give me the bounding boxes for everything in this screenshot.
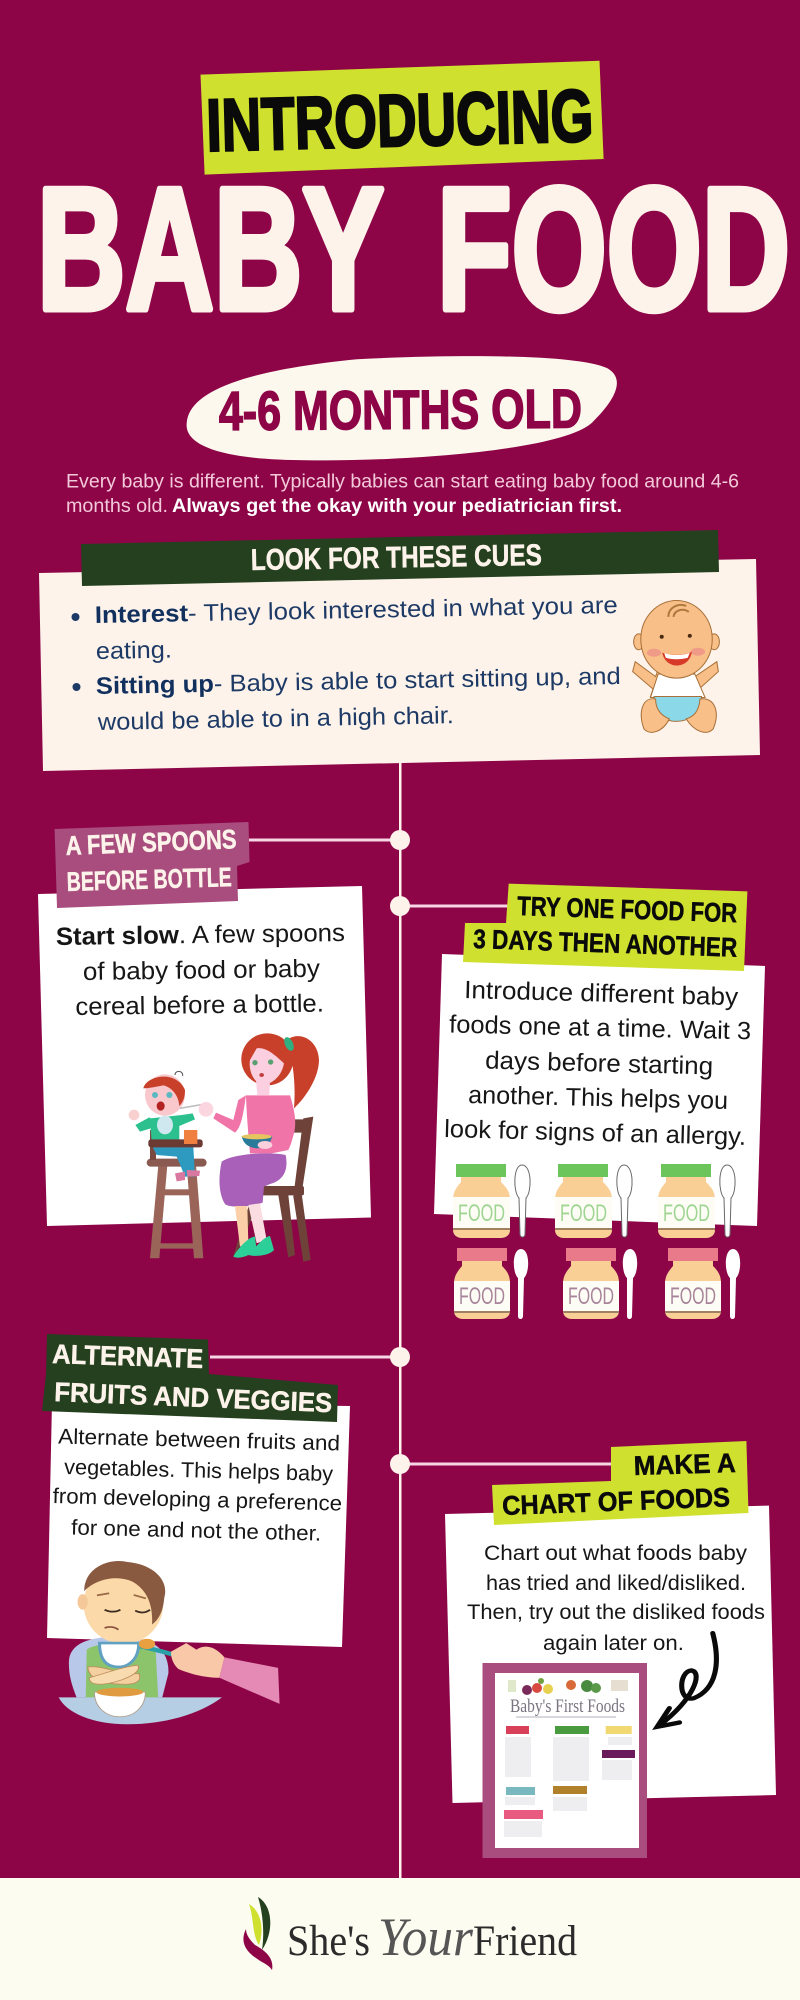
illustration: baby refusing food <box>59 1561 280 1724</box>
arrow <box>657 1633 716 1727</box>
icon: green lid food jars <box>453 1164 715 1238</box>
cues banner <box>81 530 719 586</box>
label: try one food for 3 days then another: 3 DAYS THEN ANOTHER <box>473 924 738 963</box>
body text <box>52 1425 342 1546</box>
heading: introducing: INTRODUCING <box>205 74 594 167</box>
body text: for one and not the other. <box>71 1516 321 1546</box>
body text <box>444 976 751 1151</box>
icon: pink lid food jars <box>454 1248 721 1319</box>
logo: she's your friend: Friend <box>473 1918 577 1965</box>
intro text <box>66 470 739 517</box>
body text: from developing a preference <box>52 1484 342 1516</box>
card: alternate <box>47 1402 350 1647</box>
age badge: 4-6 MONTHS OLD <box>219 377 582 442</box>
cues heading: LOOK FOR THESE CUES <box>251 539 542 577</box>
footer <box>0 1878 800 2000</box>
body text: foods one at a time. Wait 3 <box>449 1011 751 1045</box>
logo: flame <box>243 1897 272 1970</box>
card: chart of foods <box>445 1506 776 1803</box>
icon: green lid food jars: FOOD <box>663 1200 710 1227</box>
body text: Introduce different baby <box>464 976 739 1011</box>
cue: sitting up: would be able to in a high chair. <box>97 702 454 736</box>
body text: again later on. <box>543 1632 684 1655</box>
panel: make a chart of foods <box>445 1441 776 1858</box>
icon: smiling baby <box>633 600 719 732</box>
cue: interest <box>72 592 618 665</box>
icon: green lid food jars: FOOD <box>560 1200 607 1227</box>
label: try one food for 3 days then another: TRY ONE FOOD FOR <box>517 891 738 928</box>
label: make a chart of foods <box>492 1441 748 1525</box>
body text: look for signs of an allergy. <box>444 1115 746 1151</box>
icon: pink lid food jars: FOOD <box>670 1283 716 1310</box>
intro text: Every baby is different. Typically babies can start eating baby food around 4-6 <box>66 470 739 492</box>
cues card <box>39 559 760 771</box>
chart heading: Baby's First Foods <box>510 1696 625 1717</box>
body text: vegetables. This helps baby <box>64 1455 334 1486</box>
intro text: months old. <box>66 495 168 517</box>
card: try one food <box>434 954 765 1226</box>
icon: pink lid food jars: FOOD <box>568 1283 614 1310</box>
timeline connectors and dots <box>210 760 611 1878</box>
body text <box>56 919 345 1021</box>
label: a few spoons before bottle: A FEW SPOONS <box>65 824 237 861</box>
label: a few spoons before bottle: BEFORE BOTTLE <box>66 862 232 897</box>
heading: baby food <box>37 151 790 346</box>
body text: cereal before a bottle. <box>75 990 324 1021</box>
body text: Chart out what foods baby <box>484 1542 748 1565</box>
body text: days before starting <box>485 1047 713 1080</box>
label: make a chart of foods: CHART OF FOODS <box>502 1482 731 1521</box>
cue: sitting up: Sitting up - Baby is able to start sitting up, and <box>96 663 621 700</box>
panel: alternate fruits and veggies <box>42 1334 350 1724</box>
food pictures <box>508 1678 628 1695</box>
label: alternate fruits and veggies: FRUITS AND VEGGIES <box>54 1377 333 1418</box>
body text <box>467 1542 765 1655</box>
body text: Then, try out the disliked foods <box>467 1601 765 1624</box>
body text: has tried and liked/disliked. <box>486 1572 746 1595</box>
body text: of baby food or baby <box>83 955 321 986</box>
high chair <box>147 1130 207 1258</box>
label: make a chart of foods: MAKE A <box>633 1448 736 1481</box>
intro text: Always get the okay with your pediatrician first. <box>172 495 622 517</box>
icon: pink lid food jars: FOOD <box>459 1283 505 1310</box>
heading: baby food: BABY <box>37 151 384 346</box>
panel: cues <box>39 530 760 771</box>
card: a few spoons <box>38 886 371 1226</box>
image: baby's first foods chart <box>482 1663 647 1858</box>
icon: green lid food jars: FOOD <box>458 1200 505 1227</box>
panel: a few spoons <box>38 822 371 1262</box>
illustration: mother feeding child <box>129 1033 319 1262</box>
label: alternate fruits and veggies <box>42 1334 338 1422</box>
icon: white spoons <box>514 1249 740 1319</box>
chart rows <box>504 1737 632 1837</box>
child <box>129 1071 203 1181</box>
category tabs <box>504 1726 635 1819</box>
title <box>37 61 790 346</box>
label: alternate fruits and veggies: ALTERNATE <box>52 1339 204 1374</box>
cue: interest: Interest- They look interested in what you are <box>95 592 618 629</box>
body text: another. This helps you <box>468 1081 728 1115</box>
logo: she's your friend: Your <box>378 1907 474 1967</box>
body text: Start slow. A few spoons <box>56 919 345 951</box>
logo: she's your friend: She's <box>287 1918 370 1965</box>
label: a few spoons before bottle <box>55 822 249 908</box>
cue: interest: eating. <box>96 637 172 665</box>
label: try one food for 3 days then another <box>463 884 747 971</box>
panel: try one food <box>434 884 765 1319</box>
age badge <box>187 356 617 460</box>
chair <box>233 1117 313 1262</box>
icon: outlined spoons <box>515 1165 735 1237</box>
title band <box>200 61 604 175</box>
cue: sitting up <box>72 663 621 736</box>
mother <box>199 1033 319 1258</box>
body text: Alternate between fruits and <box>58 1425 340 1455</box>
logo: she's your friend <box>287 1907 577 1967</box>
